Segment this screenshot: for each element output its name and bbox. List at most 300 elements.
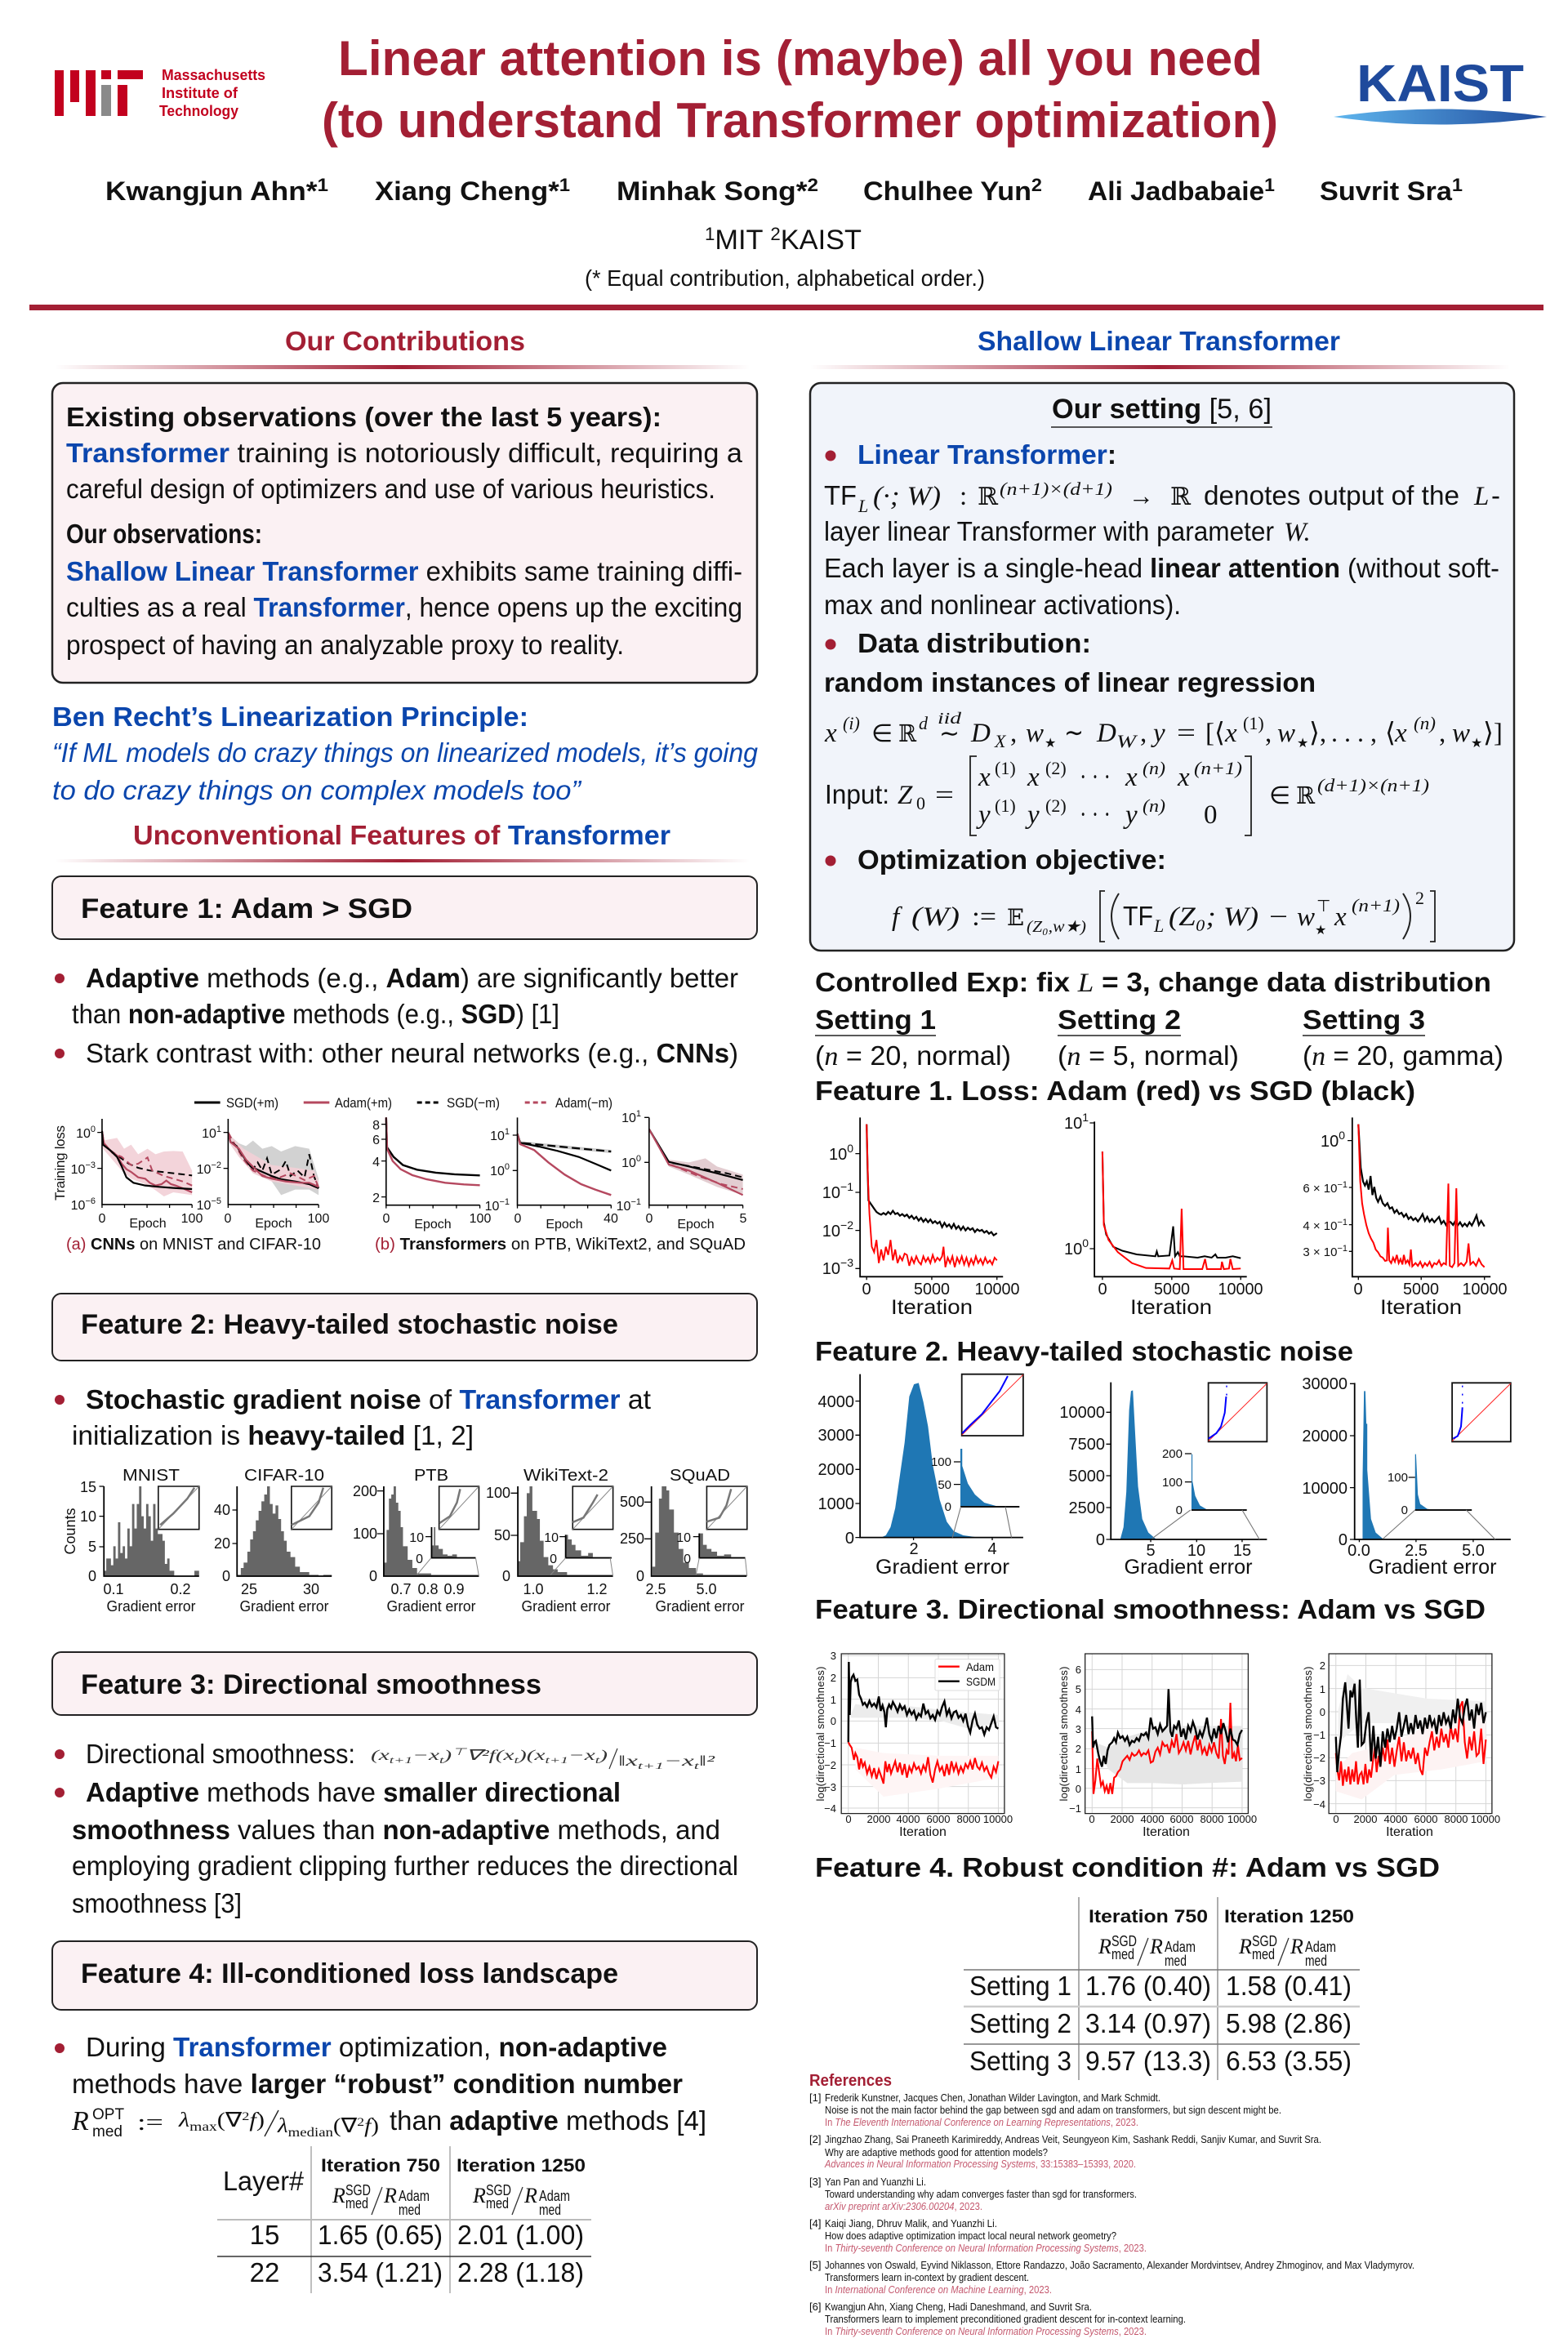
loss axis labels: 10000 (1218, 1281, 1263, 1298)
references: In International Conference on Machine Learning, 2023. (825, 2283, 1052, 2296)
title (322, 31, 1278, 148)
loss axis labels: −3 (840, 1256, 853, 1269)
chart axis labels: −1 (499, 1197, 510, 1207)
quote: Ben Recht linearization principle: Ben Recht’s Linearization Principle: (52, 702, 528, 732)
chart axis labels: 1 (505, 1127, 510, 1137)
formula: data: x (1394, 719, 1407, 748)
bullet: linear transformer: Each layer is a single-head linear attention (without soft- (824, 553, 1499, 583)
formula: input matrix: · · · (1080, 800, 1111, 830)
formula: data: iid (938, 710, 962, 728)
authors: 2 (1031, 175, 1042, 195)
table: layer results: R (472, 2184, 486, 2207)
heading: unconventional features: Unconventional Features of Transformer (133, 820, 670, 850)
blue histogram labels: 10000 (1302, 1480, 1348, 1498)
histogram labels: 2.5 (645, 1581, 666, 1597)
blue histogram labels: 1000 (818, 1495, 854, 1513)
smoothness labels: 4000 (1384, 1813, 1407, 1825)
smoothness labels: 5 (1076, 1683, 1081, 1695)
formula: data: , (1010, 719, 1017, 748)
blue histogram labels: 7500 (1068, 1436, 1105, 1454)
loss axis labels: 10 (829, 1146, 847, 1164)
references: Yan Pan and Yuanzhi Li. (825, 2176, 926, 2188)
table: layer results: 3.54 (1.21) (318, 2257, 443, 2287)
heading: feature 2 noise: Feature 2. Heavy-tailed stochastic noise (815, 1336, 1353, 1366)
blue histogram labels: 100 (1162, 1476, 1183, 1490)
blue histogram labels: 3000 (818, 1427, 854, 1445)
formula: data: W (1116, 731, 1138, 751)
formula: data: (1) (1243, 713, 1264, 733)
icon: MIT logo: Institute of (162, 85, 238, 101)
feature 4 bullet: ) (256, 2109, 265, 2132)
table: layer results: SGD (486, 2182, 511, 2198)
formula: input matrix: Input: (825, 779, 889, 809)
histogram labels: 40 (214, 1502, 230, 1518)
formula: data (824, 710, 1503, 751)
smoothness labels: −3 (824, 1781, 836, 1793)
table: setting results: SGD (1111, 1933, 1137, 1949)
formula: data: , (1439, 719, 1446, 748)
feature 3 bullets: )(x (517, 1747, 546, 1764)
histogram labels: 30 (303, 1581, 319, 1597)
formula: data: ∈ (871, 720, 893, 747)
chart axis labels: −5 (211, 1196, 221, 1206)
authors: 1 (1264, 175, 1275, 195)
chart axis labels: 1 (216, 1125, 221, 1134)
feature 4 bullet: median (288, 2126, 333, 2140)
chart: gradient error histograms (62, 1467, 747, 1615)
blue histogram labels: 2.5 (1405, 1542, 1428, 1560)
chart axis labels (52, 1109, 747, 1232)
formula: data: ℝ (898, 719, 917, 747)
panel: contributions (52, 383, 757, 683)
feature 1 bullets: Stark contrast with: other neural networks (e.g., CNNs) (86, 1038, 738, 1068)
loss axis labels: 10 (822, 1184, 840, 1202)
bullet: linear transformer: - (1491, 480, 1500, 510)
loss axis labels: 0 (1082, 1236, 1089, 1250)
loss axis labels: 10000 (1462, 1281, 1508, 1298)
chart axis labels: 8 (372, 1119, 380, 1133)
feature 3 bullets: t (439, 1754, 445, 1766)
loss axis labels: 6 × 10 (1303, 1182, 1337, 1196)
bullet: linear transformer: ℝ (978, 483, 999, 511)
formula: objective: (W) (911, 902, 960, 932)
smoothness labels: log(directional smoothness) (1058, 1666, 1070, 1802)
smoothness labels: 10000 (1227, 1813, 1257, 1825)
chart axis labels: 40 (604, 1212, 618, 1226)
loss axis labels: 0 (1098, 1281, 1107, 1298)
bullet: linear transformer: : (960, 482, 967, 511)
formula: data: x (824, 719, 837, 748)
heading: feature 3 smoothness: Feature 3. Directional smoothness: Adam vs SGD (815, 1594, 1486, 1624)
chart axis labels: 0 (383, 1212, 390, 1226)
feature 4 bullet: med (92, 2123, 122, 2140)
formula: input matrix: x (1125, 763, 1138, 792)
feature 3 bullets: −x (412, 1747, 439, 1763)
table: setting results: 3.14 (0.97) (1085, 2008, 1211, 2038)
formula: input matrix: x (978, 763, 991, 792)
formula: objective: := (972, 902, 996, 932)
table: layer results: 2.01 (1.00) (457, 2220, 584, 2250)
loss axis labels: 0 (847, 1142, 853, 1155)
formula: data: . . . , (1331, 719, 1377, 748)
table: setting results: SGD (1252, 1933, 1277, 1949)
formula: objective: ⊤ (1316, 898, 1330, 915)
histogram labels: 500 (620, 1494, 644, 1510)
formula: objective: x (1334, 902, 1347, 932)
smoothness lines (841, 1654, 1492, 1814)
feature 2 bullet: initialization is heavy-tailed [1, 2] (72, 1420, 474, 1450)
loss axis labels: 10 (1064, 1115, 1082, 1133)
histogram labels: 0.7 (390, 1581, 412, 1597)
bullet: linear transformer: denotes output of the (1204, 480, 1459, 510)
formula: data: ★ (1045, 737, 1056, 751)
histogram labels: Gradient error (655, 1598, 745, 1615)
chart axis labels: Epoch (677, 1218, 715, 1232)
blue histogram labels: 0.0 (1348, 1542, 1370, 1560)
histogram labels: 0.8 (417, 1581, 439, 1597)
loss axis labels: 4 × 10 (1303, 1219, 1337, 1233)
chart axis labels: 6 (372, 1134, 380, 1147)
table: setting results: Setting 3 (969, 2046, 1071, 2076)
table: setting results: R (1149, 1935, 1163, 1958)
histogram labels: 0.1 (103, 1581, 124, 1597)
loss axis labels: Iteration (891, 1296, 973, 1319)
histogram labels: Gradient error (521, 1598, 611, 1615)
loss axis labels: Iteration (1130, 1296, 1212, 1319)
feature 4 box (52, 1941, 757, 2010)
histogram labels: 0.2 (170, 1581, 191, 1597)
formula: input matrix: (n) (1143, 795, 1165, 816)
references: Kaiqi Jiang, Dhruv Malik, and Yuanzhi Li. (825, 2217, 997, 2230)
smoothness labels: Iteration (899, 1825, 947, 1839)
quote: Ben Recht linearization principle: to do crazy things on complex models too” (52, 775, 582, 805)
chart axis labels: 10 (490, 1129, 505, 1143)
chart axis labels: Epoch (546, 1218, 583, 1232)
histogram labels: 10 (676, 1531, 691, 1545)
heading: feature 1 loss: Feature 1. Loss: Adam (red) vs SGD (black) (815, 1076, 1415, 1106)
smoothness labels: 10000 (983, 1813, 1013, 1825)
formula: data: ⟩, (1309, 719, 1326, 748)
table: layer results: 2.28 (1.18) (457, 2257, 584, 2287)
feature 3 bullets: ‖² (699, 1753, 715, 1769)
chart: blue histograms (818, 1374, 1511, 1579)
bullet: linear transformer: → (1129, 482, 1154, 511)
table: layer results: med (539, 2202, 561, 2218)
feature 4 bullet: max (189, 2120, 217, 2134)
bullet: linear transformer: L (1473, 482, 1489, 511)
table: setting results: Iteration 1250 (1224, 1906, 1354, 1927)
formula: data: d (919, 713, 929, 733)
icon: KAIST logo: KAIST (1356, 54, 1524, 113)
formula: objective: TF (1123, 901, 1153, 931)
references: How does adaptive optimization impact local neural network geometry? (825, 2230, 1116, 2242)
formula: input matrix: y (1123, 800, 1138, 830)
formula: data: ★ (1297, 737, 1308, 751)
feature 3 bullets: t+1 (390, 1754, 412, 1766)
feature 3 bullets: employing gradient clipping further reduces the directional (72, 1851, 738, 1881)
blue histogram labels: 5 (1146, 1542, 1156, 1560)
smoothness labels: Iteration (1143, 1825, 1190, 1839)
equal contribution note: (* Equal contribution, alphabetical order.) (585, 265, 985, 291)
chart legend: SGD(−m) (447, 1095, 500, 1111)
histogram labels: 20 (214, 1535, 230, 1552)
references: Kwangjun Ahn, Xiang Cheng, Hadi Daneshmand, and Suvrit Sra. (825, 2301, 1092, 2313)
blue histogram labels: Gradient error (875, 1556, 1009, 1579)
formula: data: w (1026, 719, 1044, 748)
controlled experiment heading: Controlled Exp: fix L = 3, change data distribution (815, 967, 1491, 998)
table: setting results: 6.53 (3.55) (1226, 2046, 1352, 2076)
chart axis labels: 0 (636, 1154, 641, 1164)
heading: unconventional features (55, 820, 750, 862)
chart axis labels: 10 (71, 1163, 85, 1177)
bullet: linear transformer: layer linear Transformer with parameter (824, 516, 1274, 546)
title: Linear attention is (maybe) all you need (338, 31, 1263, 86)
chart: loss curves (822, 1111, 1508, 1319)
references: References (809, 2072, 892, 2090)
chart axis labels: Epoch (255, 1217, 292, 1231)
formula: input matrix (825, 756, 1429, 835)
chart axis labels: 10 (617, 1200, 630, 1214)
formula: objective: 𝔼 (1007, 904, 1024, 931)
feature 4 bullet: R (71, 2106, 89, 2136)
table: layer results: R (332, 2184, 345, 2207)
formula: data: ★ (1471, 737, 1482, 751)
smoothness labels: 8000 (957, 1813, 980, 1825)
loss axis labels: 10000 (975, 1281, 1019, 1298)
chart axis labels: 10 (490, 1165, 505, 1178)
quote: Ben Recht linearization principle (52, 702, 759, 805)
chart axis labels: 10 (485, 1200, 499, 1214)
blue histogram labels: 10000 (1059, 1404, 1105, 1422)
references: [3] (809, 2176, 821, 2188)
feature 3 box: Feature 3: Directional smoothness (81, 1669, 541, 1700)
feature 3 bullets: smoothness [3] (72, 1888, 242, 1918)
feature 1 bullets: Adaptive methods (e.g., Adam) are significantly better (86, 963, 738, 993)
histogram labels: 0 (88, 1568, 96, 1584)
affiliations: KAIST (781, 225, 862, 256)
formula: data: , (1140, 719, 1147, 748)
chart axis labels: 10 (621, 1111, 636, 1125)
feature 4 bullet (55, 2032, 706, 2140)
title: (to understand Transformer optimization) (322, 93, 1278, 148)
controlled experiment heading: (n = 20, gamma) (1303, 1040, 1503, 1071)
chart axis labels: 100 (308, 1212, 329, 1226)
blue histogram labels: 0 (1096, 1531, 1105, 1549)
table: layer results: 15 (250, 2220, 279, 2250)
bullet: linear transformer: max and nonlinear activations). (824, 590, 1181, 620)
feature 3 bullets: ‖x (618, 1753, 638, 1769)
blue histogram labels: 100 (1388, 1471, 1408, 1485)
references: Frederik Kunstner, Jacques Chen, Jonathan Wilder Lavington, and Mark Schmidt. (825, 2091, 1160, 2104)
feature 4 bullet: f (364, 2115, 374, 2137)
formula: input matrix: = (935, 781, 954, 810)
formula: objective: − (1269, 902, 1288, 932)
chart legend: Adam(+m) (335, 1095, 392, 1111)
loss axis labels: 0 (862, 1281, 871, 1298)
references: Jingzhao Zhang, Sai Praneeth Karimireddy, Andreas Veit, Seungyeon Kim, Sashank Reddi, Sanjiv Kumar, and Suvrit Sra. (825, 2133, 1321, 2145)
chart axis labels: −6 (85, 1196, 96, 1206)
bullet: data distribution: random instances of linear regression (824, 667, 1316, 697)
formula: data: = (1177, 719, 1196, 748)
chart axis labels: 5 (740, 1212, 747, 1226)
smoothness labels: 2 (831, 1672, 836, 1684)
smoothness labels: 8000 (1200, 1813, 1223, 1825)
table: layer results: Iteration 1250 (457, 2155, 586, 2176)
blue histogram labels: 0 (1176, 1503, 1183, 1517)
loss axis labels: −2 (840, 1218, 853, 1232)
histogram labels: Counts (62, 1508, 78, 1555)
chart axis labels: 0 (505, 1162, 510, 1172)
smoothness labels: −1 (1313, 1729, 1325, 1741)
table: layer results: med (399, 2202, 421, 2218)
histogram labels: 10 (544, 1531, 559, 1545)
loss axis labels: 0 (1339, 1129, 1345, 1142)
chart axis labels: −2 (211, 1160, 221, 1170)
feature 1 box (52, 876, 757, 939)
chart axis labels: 0 (514, 1212, 522, 1226)
smoothness labels: 2000 (1354, 1813, 1377, 1825)
smoothness labels: 4 (1076, 1704, 1081, 1716)
feature 4 bullet: f (249, 2109, 260, 2132)
histogram labels: 100 (353, 1526, 377, 1542)
table: layer results: 1.65 (0.65) (318, 2220, 443, 2250)
loss axis labels: 10 (822, 1260, 840, 1278)
affiliations: MIT (715, 225, 770, 256)
blue histogram labels: 0 (945, 1500, 951, 1514)
smoothness labels: 1 (1076, 1763, 1081, 1775)
references: Johannes von Oswald, Eyvind Niklasson, Ettore Randazzo, João Sacramento, Alexander Mordvintsev, Andrey Zhmoginov, and Max Vladymyrov. (825, 2259, 1414, 2271)
chart legend: Adam(−m) (555, 1095, 612, 1111)
authors: 1 (317, 175, 328, 195)
blue histogram labels: 200 (1162, 1447, 1183, 1461)
table: layer results: 22 (250, 2257, 279, 2287)
formula: input matrix: (d+1)×(n+1) (1317, 775, 1429, 795)
quote: Ben Recht linearization principle: “If ML models do crazy things on linearized models, it’s going (52, 737, 759, 768)
panel: our setting (810, 383, 1514, 951)
formula: input matrix: (2) (1045, 758, 1067, 778)
smoothness labels: −1 (824, 1737, 836, 1749)
loss axis labels: 3 × 10 (1303, 1245, 1337, 1259)
table: layer results: Iteration 750 (321, 2155, 440, 2176)
smoothness labels: 3 (1076, 1723, 1081, 1735)
smoothness labels: 6000 (1414, 1813, 1437, 1825)
feature 4 bullet: ) (371, 2115, 379, 2137)
loss axis labels: Iteration (1380, 1296, 1462, 1319)
smoothness labels: 2 (1320, 1659, 1325, 1672)
table: setting results: Setting 2 (969, 2008, 1071, 2038)
loss axis labels: 10 (1064, 1241, 1082, 1258)
formula: objective: (n+1) (1352, 895, 1400, 915)
formula: data: ⟨ (1385, 719, 1396, 748)
chart: training loss (52, 1095, 747, 1254)
table: layer results: R (383, 2184, 397, 2207)
chart axis labels: Epoch (129, 1217, 167, 1231)
formula: data: [⟨ (1205, 719, 1225, 748)
feature 3 bullets: ) (599, 1747, 608, 1764)
chart captions: (a) CNNs on MNIST and CIFAR-10 (66, 1236, 321, 1254)
blue histogram labels: 100 (931, 1455, 951, 1469)
panel: contributions: Our observations: (66, 519, 262, 549)
panel: contributions: culties as a real Transformer, hence opens up the exciting (66, 592, 742, 622)
smoothness labels: −4 (1313, 1798, 1325, 1811)
smoothness labels: 2000 (1111, 1813, 1134, 1825)
loss axis labels (822, 1111, 1508, 1319)
chart axis labels: Training loss (52, 1125, 68, 1200)
loss axis labels: 10 (822, 1223, 840, 1241)
smoothness labels: 0 (845, 1813, 852, 1825)
formula: data: (i) (843, 713, 860, 733)
icon: KAIST logo (1334, 54, 1547, 124)
references: Transformers learn in-context by gradient descent. (825, 2271, 1029, 2283)
references: [2] (809, 2133, 821, 2145)
references: In Thirty-seventh Conference on Neural Information Processing Systems, 2023. (825, 2325, 1147, 2337)
histogram labels: 1.0 (523, 1581, 544, 1597)
smoothness labels (814, 1650, 1500, 1839)
blue histogram labels: 5000 (1068, 1468, 1105, 1486)
authors (105, 175, 1463, 206)
chart axis labels: 100 (181, 1212, 203, 1226)
histogram labels: 25 (241, 1581, 257, 1597)
feature 3 bullets: t (514, 1754, 519, 1766)
feature 3 bullets: t+1 (638, 1760, 664, 1771)
feature 4 bullet: During Transformer optimization, non-adaptive (86, 2032, 667, 2062)
authors: Ali Jadbabaie (1088, 176, 1256, 206)
table: layer results: R (523, 2184, 537, 2207)
loss axis labels: 5000 (914, 1281, 950, 1298)
blue histogram labels: 20000 (1302, 1428, 1348, 1446)
smoothness labels: −2 (1313, 1752, 1325, 1764)
histogram labels: 0 (684, 1552, 691, 1566)
table: setting results: 5.98 (2.86) (1226, 2008, 1352, 2038)
formula: input matrix: 0 (916, 793, 925, 813)
chart axis labels: Epoch (414, 1218, 452, 1232)
histogram labels: 0 (502, 1568, 510, 1584)
smoothness labels: 4000 (1141, 1813, 1164, 1825)
histogram labels: 250 (620, 1530, 644, 1547)
table: layer results: Adam (539, 2188, 570, 2204)
smoothness labels: 4000 (897, 1813, 920, 1825)
histogram labels: PTB (414, 1467, 448, 1485)
bullet: linear transformer: W. (1284, 518, 1311, 547)
controlled experiment heading: Setting 3 (1303, 1004, 1425, 1035)
setting heading: Our setting [5, 6] (1052, 394, 1272, 425)
chart legend: SGD(+m) (226, 1095, 278, 1111)
feature 4 bullet: (∇ (333, 2115, 358, 2137)
panel: contributions: careful design of optimizers and use of various heuristics. (66, 474, 715, 504)
feature 1 bullets (55, 963, 738, 1068)
right column (809, 326, 1514, 2337)
blue histogram labels: 15 (1233, 1542, 1251, 1560)
formula: objective: (Z₀; W) (1169, 902, 1258, 932)
references: [1] (809, 2091, 821, 2104)
formula: data: ⟩] (1483, 719, 1503, 748)
histogram labels: 5.0 (696, 1581, 717, 1597)
loss axis labels: 1 (1082, 1111, 1089, 1124)
authors: 1 (1452, 175, 1463, 195)
formula: input matrix: · · · (1080, 763, 1111, 792)
smoothness labels: Iteration (1386, 1825, 1433, 1839)
formula: objective: f (892, 902, 902, 932)
feature 3 bullets: ⊤ (452, 1746, 468, 1757)
table: setting results: med (1252, 1946, 1275, 1962)
blue histogram labels: 2500 (1068, 1499, 1105, 1517)
smoothness labels: log(directional smoothness) (1302, 1666, 1314, 1802)
table: setting results: 9.57 (13.3) (1085, 2046, 1211, 2076)
smoothness labels: 0 (1320, 1706, 1325, 1718)
blue histogram labels: 0 (1401, 1503, 1408, 1517)
smoothness labels: 1 (831, 1694, 836, 1706)
formula: input matrix: Z (898, 781, 913, 810)
